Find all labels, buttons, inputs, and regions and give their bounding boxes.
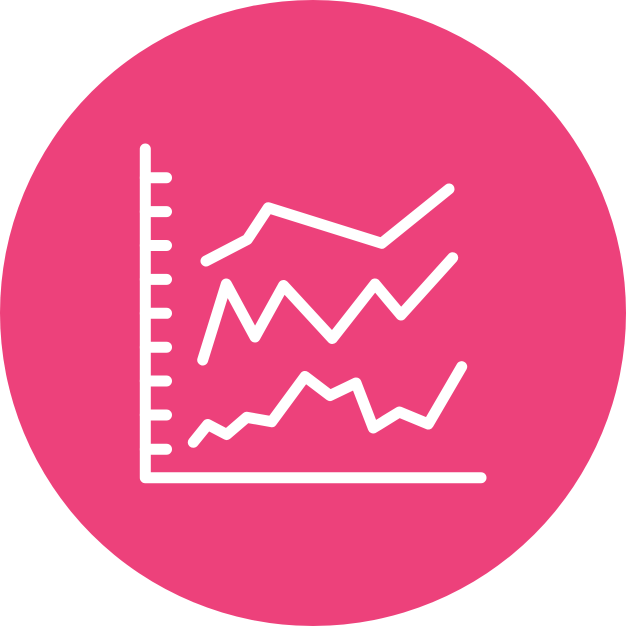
axis ticks — [145, 178, 166, 449]
axes — [145, 149, 481, 478]
bottom line series — [193, 367, 462, 442]
top line series — [206, 189, 449, 261]
chart icon — [145, 149, 481, 478]
middle line series — [203, 258, 453, 360]
